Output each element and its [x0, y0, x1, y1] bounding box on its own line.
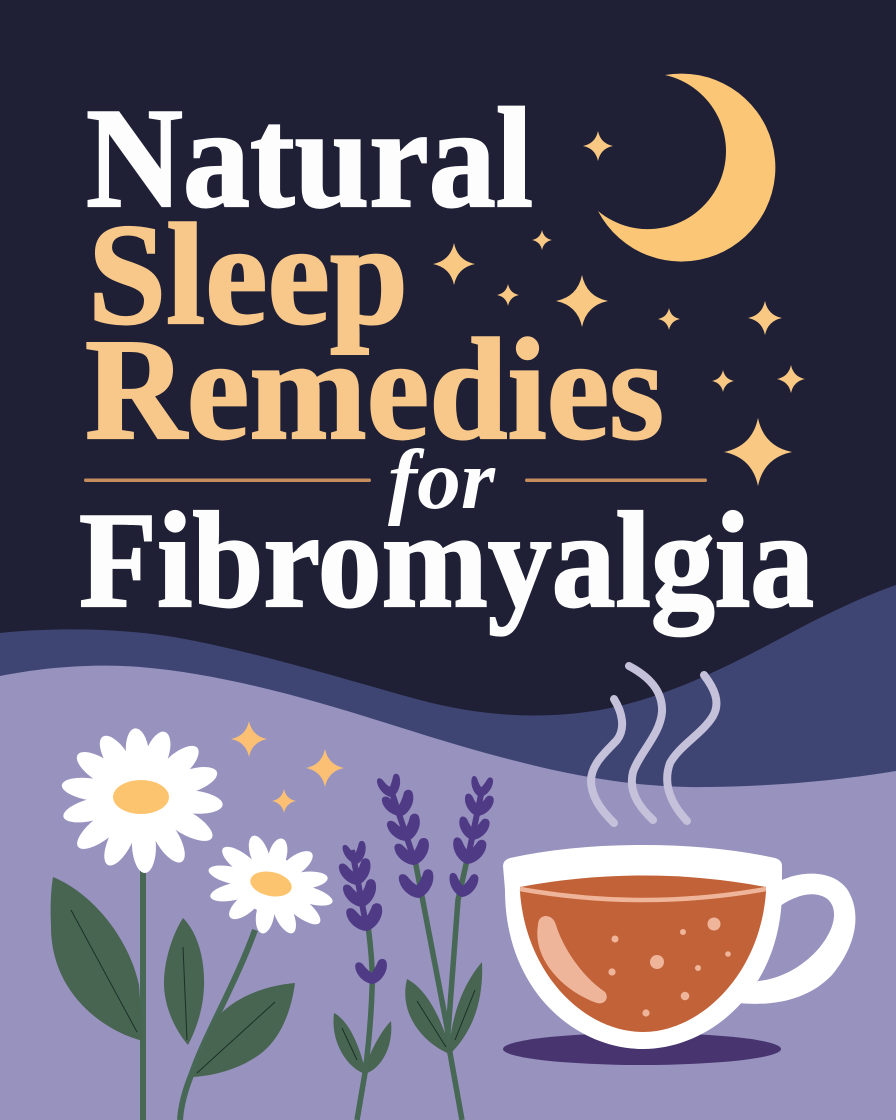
title line: Fibromyalgia: Fibromyalgia: [79, 484, 814, 636]
leaves: [333, 1013, 391, 1074]
tea highlight: [537, 916, 607, 1003]
icon: crescent moon: [598, 74, 775, 262]
flower centre: [248, 868, 294, 900]
cup body: [503, 845, 782, 1049]
steam: [591, 666, 716, 823]
stem: [140, 870, 146, 1120]
stem: [415, 860, 462, 1120]
title line: Remedies: Remedies: [85, 310, 664, 470]
leaf middle: [164, 918, 204, 1045]
chamomile small: [164, 833, 335, 1120]
lavender middle: [376, 773, 462, 1120]
flower centre: [113, 780, 169, 814]
wave: mid blue hill: [0, 585, 896, 820]
tea: [520, 876, 766, 1032]
buds: [376, 773, 436, 900]
tea surface line: [520, 889, 766, 900]
buds: [338, 840, 389, 986]
tea bubbles: [608, 918, 731, 1017]
petals: [60, 727, 224, 873]
stem: [357, 925, 372, 1120]
lavender right: [405, 775, 494, 1055]
saucer shadow: [503, 1033, 781, 1065]
teacup: [503, 845, 855, 1065]
wave: lavender foreground: [0, 666, 896, 1120]
chamomile large: [51, 727, 224, 1120]
leaves: [405, 962, 482, 1055]
handle: [738, 874, 855, 1004]
leaf left: [51, 877, 143, 1041]
lavender left: [333, 840, 391, 1120]
buds: [448, 775, 494, 899]
title line: for: for: [388, 433, 496, 527]
title: [79, 79, 814, 636]
garden stars: [231, 721, 344, 813]
leaf right: [193, 983, 295, 1077]
title line: Natural: Natural: [86, 79, 533, 237]
stem: [180, 930, 255, 1120]
night stars: [433, 131, 805, 486]
stem: [448, 860, 467, 1053]
petals: [207, 833, 335, 937]
title line: Sleep: Sleep: [88, 195, 408, 355]
